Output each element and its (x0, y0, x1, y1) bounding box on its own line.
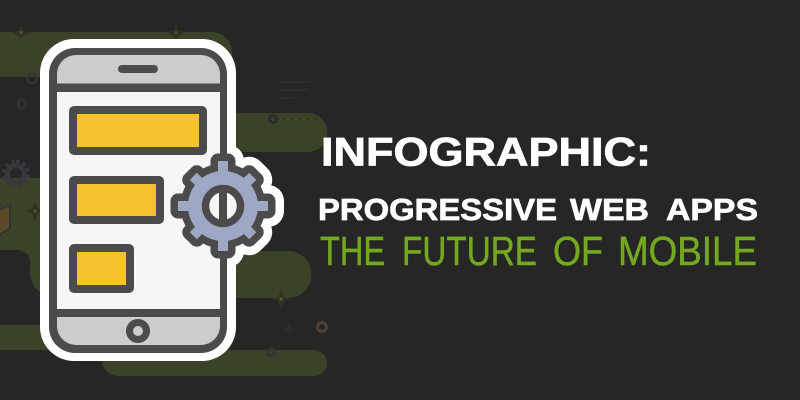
icon: gear (178, 161, 268, 251)
faint lines (277, 81, 311, 98)
subtitle: the future of mobile: OF (553, 228, 603, 274)
dotted trail (283, 118, 318, 120)
green background bands (0, 32, 328, 376)
subtitle: the future of mobile: MOBILE (618, 228, 757, 274)
icon: sparkles (12, 24, 296, 336)
content block 3 (73, 248, 130, 289)
phone speaker (118, 65, 158, 73)
subtitle: progressive web apps: PROGRESSIVE (318, 192, 557, 227)
phone white outline (40, 39, 236, 361)
subtitle: progressive web apps (318, 192, 758, 227)
subtitle: the future of mobile (320, 228, 757, 274)
icon: faint gear (3, 162, 28, 187)
phone (40, 39, 236, 361)
content block 2 (73, 180, 160, 220)
home button (130, 322, 146, 340)
subtitle: the future of mobile: THE (320, 228, 385, 274)
icon: small rings (18, 74, 326, 356)
icon: faint box (0, 205, 10, 240)
faint background icons (0, 24, 326, 356)
phone top bezel (57, 55, 220, 84)
content block 1 (73, 110, 203, 151)
phone bottom bezel (57, 317, 220, 345)
subtitle: progressive web apps: WEB (570, 192, 649, 227)
phone screen (57, 92, 220, 309)
subtitle: progressive web apps: APPS (666, 192, 758, 227)
title: infographic: INFOGRAPHIC: (321, 130, 651, 174)
phone dark body (49, 48, 227, 353)
subtitle: the future of mobile: FUTURE (402, 228, 537, 274)
